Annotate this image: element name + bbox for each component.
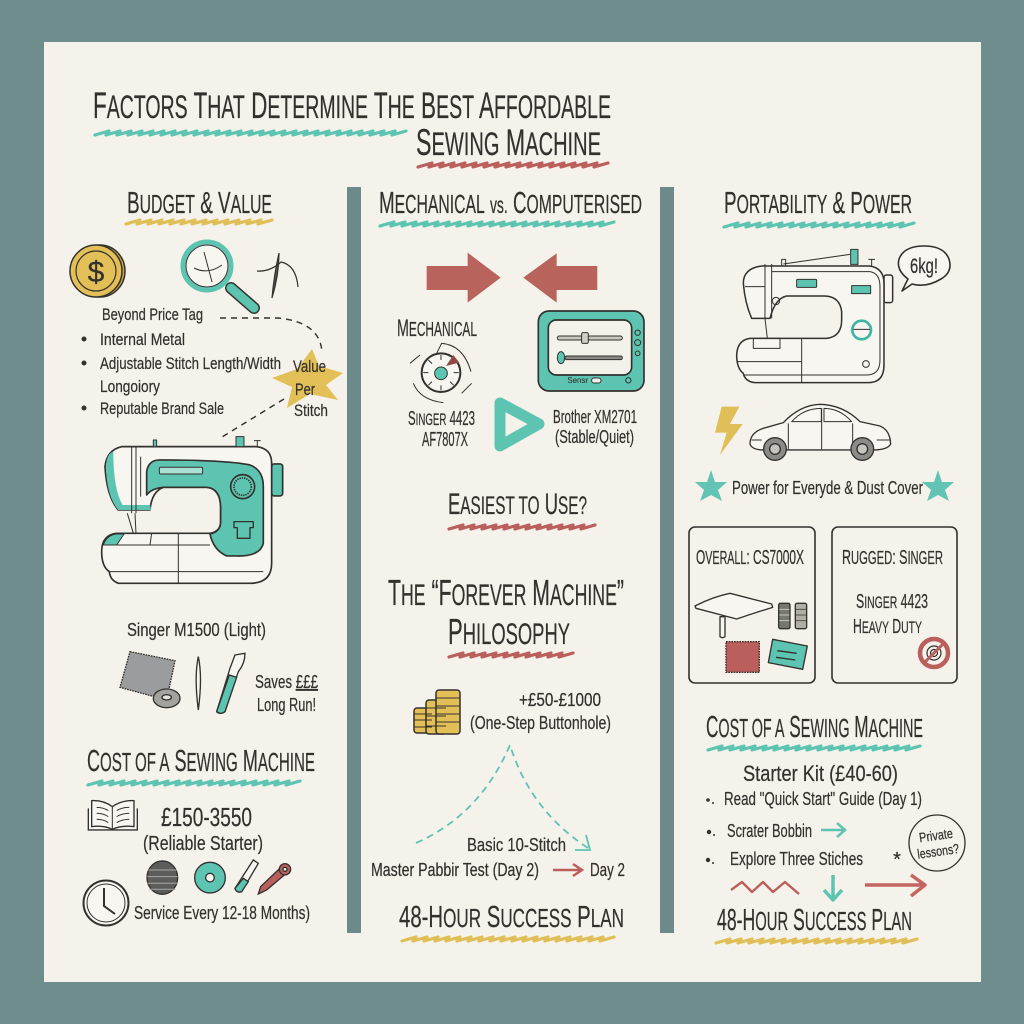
text: price range bbox=[143, 802, 263, 855]
heading: cost of a sewing machine: COST OF A SEWING MACHINE bbox=[87, 743, 315, 778]
label: brother xm2701: (Stable/Quiet) bbox=[555, 427, 634, 447]
icon: play triangle bbox=[500, 403, 539, 446]
callout: saves long run: Saves £££ bbox=[255, 672, 318, 692]
panel: mechanical vs computerised bbox=[371, 185, 644, 941]
text: basic stitch and test: Day 2 bbox=[590, 860, 625, 880]
text block: beyond price tag list: Longoiory bbox=[100, 377, 160, 396]
icon: computerised screen: Sensr bbox=[567, 375, 588, 385]
card: rugged pick: SINGER 4423 bbox=[856, 591, 928, 613]
heading: forever machine philosophy bbox=[388, 572, 624, 657]
title: FACTORS THAT DETERMINE THE BEST AFFORDABLE bbox=[93, 85, 611, 126]
text block: beyond price tag list bbox=[82, 305, 281, 418]
text: basic stitch and test: Basic 10-Stitch bbox=[467, 835, 566, 855]
callout: saves long run: Long Run! bbox=[257, 695, 316, 715]
heading: portability and power: PORTABILITY & POWER bbox=[724, 185, 912, 220]
text: starter kit checklist bbox=[706, 761, 922, 871]
arrow: scrater bobbin bbox=[821, 823, 845, 837]
card: rugged pick bbox=[832, 527, 957, 683]
text: service interval: Service Every 12-18 Months) bbox=[134, 903, 310, 923]
icon: lightning bolt bbox=[715, 407, 743, 455]
callout: value per stitch: Per bbox=[295, 380, 315, 399]
icon: teal sewing machine bbox=[102, 437, 283, 583]
card: overall pick bbox=[689, 527, 815, 683]
card: rugged pick: RUGGED: SINGER bbox=[842, 547, 943, 569]
callout: 6kg: 6kg! bbox=[910, 255, 938, 278]
heading: budget and value: BUDGET & VALUE bbox=[127, 185, 272, 220]
heading: cost of a sewing machine: COST OF A SEWING MACHINE bbox=[706, 709, 923, 744]
label: singer m1500: Singer M1500 (Light) bbox=[127, 620, 266, 640]
callout: value per stitch bbox=[272, 349, 343, 420]
text: starter kit checklist: * bbox=[893, 849, 901, 871]
icons: opposing arrows bbox=[427, 253, 597, 303]
heading: forever machine philosophy: PHILOSOPHY bbox=[448, 611, 570, 652]
icon: coin stacks bbox=[414, 690, 460, 734]
heading: easiest to use: EASIEST TO USE? bbox=[448, 488, 587, 521]
icons: table, spools, swatch, pouch bbox=[695, 593, 807, 672]
text: basic stitch and test: Master Pabbir Test (Day 2) bbox=[371, 860, 539, 880]
heading: mechanical vs computerised: MECHANICAL vs. COMPUTERISED bbox=[379, 185, 642, 220]
text block: beyond price tag list: Beyond Price Tag bbox=[102, 305, 203, 324]
icon: mechanical dial bbox=[410, 343, 472, 403]
callout: value per stitch: Stitch bbox=[294, 401, 328, 420]
dashed connectors bbox=[220, 318, 322, 437]
text: price range: £150-3550 bbox=[161, 802, 252, 832]
arrow: day 2 bbox=[553, 864, 582, 876]
icon: open book bbox=[88, 801, 137, 830]
callout: private lessons bbox=[909, 815, 965, 871]
label: singer 4423 bbox=[408, 408, 475, 451]
text: starter kit checklist: Starter Kit (£40-60) bbox=[743, 761, 898, 786]
text block: beyond price tag list: Adjustable Stitch Length/Width bbox=[100, 354, 281, 373]
panel: budget and value bbox=[70, 185, 343, 926]
icon: magnifying glass bbox=[183, 242, 254, 308]
icon: no tangled thread bbox=[920, 639, 948, 667]
callout: saves long run bbox=[255, 672, 318, 715]
text: price step up: +£50-£1000 bbox=[519, 690, 601, 710]
text: starter kit checklist: Read "Quick Start" Guide (Day 1) bbox=[724, 789, 922, 809]
text: price step up: (One-Step Buttonhole) bbox=[470, 713, 611, 733]
icon: needle and thread bbox=[257, 253, 298, 298]
icon: car bbox=[750, 404, 891, 460]
icon: outline sewing machine bbox=[737, 249, 893, 383]
text: price step up bbox=[470, 690, 611, 733]
panel: portability and power bbox=[689, 185, 965, 943]
title: SEWING MACHINE bbox=[416, 122, 601, 163]
label: singer 4423: AF7807X bbox=[422, 429, 468, 451]
title bbox=[93, 85, 611, 167]
callout: private lessons: lessons? bbox=[916, 841, 960, 862]
label: brother xm2701 bbox=[553, 407, 637, 447]
icon: coin: $ bbox=[88, 256, 105, 289]
icons: fabric, needle, seam ripper bbox=[120, 652, 245, 713]
arrows: zigzag, down, right bbox=[731, 875, 925, 900]
text block: beyond price tag list: Reputable Brand Sale bbox=[100, 399, 224, 418]
label: mechanical: MECHANICAL bbox=[397, 315, 477, 342]
callout: value per stitch: Value bbox=[293, 357, 326, 376]
heading: forever machine philosophy: THE “FOREVER MACHINE” bbox=[388, 572, 624, 613]
text: basic stitch and test bbox=[371, 835, 625, 880]
card: rugged pick: HEAVY DUTY bbox=[853, 616, 922, 638]
heading: 48-hour success plan: 48-HOUR SUCCESS PLAN bbox=[717, 902, 912, 937]
text: power line with stars: Power for Everyde & Dust Cover bbox=[732, 478, 923, 498]
label: singer 4423: SINGER 4423 bbox=[408, 408, 475, 430]
dashed teal arrows bbox=[416, 745, 590, 850]
heading: mechanical vs computerised bbox=[379, 185, 642, 226]
text: power line with stars bbox=[695, 470, 954, 501]
icon: clock bbox=[84, 880, 128, 926]
text: starter kit checklist: Scrater Bobbin bbox=[727, 821, 812, 841]
callout: private lessons: Private bbox=[918, 826, 954, 845]
heading: 48-hour success plan: 48-HOUR SUCCESS PLAN bbox=[399, 899, 624, 934]
text block: beyond price tag list: Internal Metal bbox=[100, 330, 185, 349]
icon: coin bbox=[70, 245, 125, 297]
icons: thread, bobbin, chalk, ripper bbox=[147, 860, 291, 894]
callout: 6kg bbox=[898, 246, 950, 291]
icon: computerised screen bbox=[538, 311, 644, 391]
card: overall pick: OVERALL: CS7000X bbox=[696, 547, 804, 569]
label: brother xm2701: Brother XM2701 bbox=[553, 407, 637, 427]
text: price range: (Reliable Starter) bbox=[143, 833, 263, 855]
text: starter kit checklist: Explore Three Stiches bbox=[730, 849, 863, 869]
